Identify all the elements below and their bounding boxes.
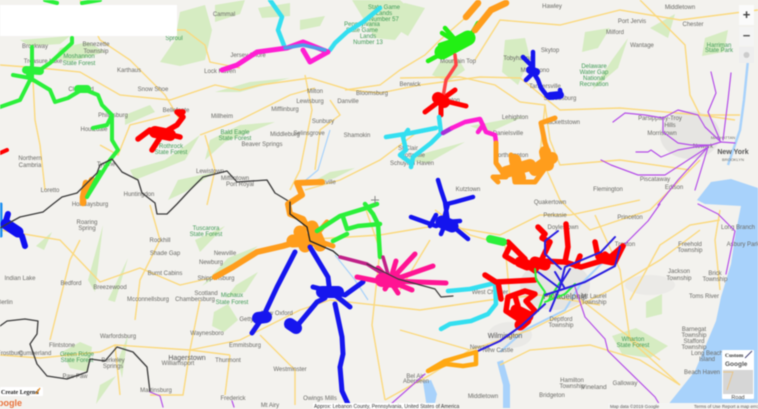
place labels: Hamilton <box>560 378 584 384</box>
park labels: State Forest <box>61 358 94 364</box>
title box <box>0 5 177 36</box>
place labels: Beach Haven <box>684 370 720 376</box>
park labels: Number 57 <box>369 17 400 23</box>
place labels: Shippensburg <box>197 276 235 282</box>
place labels: Morristown <box>647 131 677 137</box>
place labels: Mt Laurel <box>581 294 607 300</box>
place labels: Hollidaysburg <box>72 202 108 208</box>
place labels: Long Beach <box>691 351 723 357</box>
place labels: Snow Shoe <box>138 87 169 93</box>
park labels <box>60 5 734 364</box>
place labels: Doylestown <box>547 225 579 231</box>
place labels: Hackettstown <box>544 120 580 126</box>
place labels: Indian Lake <box>4 276 36 282</box>
place labels: Millersville <box>308 180 336 186</box>
park labels: Rothrock <box>159 144 184 150</box>
place labels: Chester <box>682 22 704 28</box>
place labels: Danville <box>337 99 359 105</box>
park labels: Lands <box>360 34 376 40</box>
large city labels <box>162 135 749 391</box>
place labels: Township <box>548 323 574 329</box>
large city labels: New York <box>717 149 749 156</box>
attribution bar <box>608 403 758 409</box>
place labels: Millheim <box>211 114 233 120</box>
place labels: Berkeley <box>101 358 125 364</box>
route network: blue Philadelphia <box>478 231 620 351</box>
place labels: Shamokin <box>344 133 370 139</box>
place labels: Lewistown <box>196 169 224 175</box>
park labels: National <box>583 76 605 82</box>
large city labels: Vineland <box>581 384 607 391</box>
zoom controls <box>739 5 754 63</box>
place labels: Shade Gap <box>150 251 181 257</box>
create legend button <box>0 387 43 396</box>
place labels: Township <box>581 300 607 306</box>
place labels: Toms River <box>689 294 719 300</box>
place labels: Flintstone <box>49 343 76 349</box>
park labels: State Forest <box>216 300 249 306</box>
place labels: Mountain Top <box>440 59 477 65</box>
park labels: State Forest <box>617 343 650 349</box>
place labels: Treasure Lake <box>24 59 63 65</box>
place labels: Brockway <box>22 44 48 50</box>
place labels: Rockhill <box>149 238 171 244</box>
place labels: Waynesboro <box>190 331 224 337</box>
place labels: Township <box>702 277 728 283</box>
park labels: State Game <box>368 5 401 11</box>
place labels: Mcconnellsburg <box>127 297 169 303</box>
place labels: Houtzdale <box>80 127 108 133</box>
park labels: Lands <box>376 11 392 17</box>
route network: cyan north <box>270 0 380 50</box>
route network: cyan middle <box>386 117 441 167</box>
place labels: Burnt Cabins <box>148 271 182 277</box>
route network: blue Kutztown <box>411 180 473 239</box>
route network: blue left <box>1 204 25 246</box>
place labels: Karthaus <box>117 68 141 74</box>
large city labels: Hagerstown <box>168 355 206 362</box>
place labels: Township <box>83 49 109 55</box>
place labels: Benezette <box>82 42 110 48</box>
route network: orange central <box>215 182 333 277</box>
park labels: Green Ridge <box>60 352 95 358</box>
place labels: Spring <box>78 226 96 232</box>
water <box>300 60 758 409</box>
park labels: Michaux <box>221 293 243 299</box>
place labels: Newville <box>214 251 237 257</box>
place labels: Wantage <box>630 43 655 49</box>
place labels: Milford <box>606 30 624 36</box>
park labels: Delaware <box>581 64 607 70</box>
place labels: Breezewood <box>93 285 127 291</box>
place labels: Jersey Shore <box>230 53 266 59</box>
place labels: Mt Pocono <box>521 68 550 74</box>
park labels: Bald Eagle <box>220 130 250 136</box>
map type control: Custom <box>725 353 744 359</box>
large city labels: Wilmington <box>488 333 522 340</box>
place labels: Port Jervis <box>618 19 646 25</box>
place labels: Lock Haven <box>204 69 236 75</box>
place labels: Piscataway <box>640 177 670 183</box>
place labels: Sunbury <box>312 119 334 125</box>
large city labels: West Chester <box>472 290 508 296</box>
park labels: Number 13 <box>353 40 384 46</box>
route network: central red <box>0 112 183 153</box>
place labels: Selinsgrove <box>293 131 325 137</box>
route network: blue Poconos <box>523 52 561 97</box>
place labels: Newburg <box>199 260 223 266</box>
black line through star <box>367 264 453 297</box>
place labels: Stroudsburg <box>544 96 576 102</box>
park labels: Pennsylvania <box>344 22 381 28</box>
place labels: Beaver Springs <box>241 142 283 148</box>
place labels: Township <box>681 345 707 351</box>
place labels: Jackson <box>668 269 690 275</box>
place labels: Roaring <box>76 220 98 226</box>
attribution bar: Terms of Use <box>694 404 721 409</box>
place labels: Trenton <box>615 242 635 248</box>
park labels: Recreation <box>579 82 609 88</box>
zoom controls: − <box>743 28 751 43</box>
route network: orange Altoona <box>83 180 92 203</box>
place labels: Mifflinburg <box>271 107 299 113</box>
place labels: Quakertown <box>534 200 566 206</box>
place labels: Tobyhanna <box>503 56 533 62</box>
park labels: State Forest <box>63 61 96 67</box>
route network: black line <box>0 159 290 392</box>
place labels: Middleburg <box>270 132 300 138</box>
route network: orange Allentown <box>493 118 555 182</box>
place labels: Mifflintown <box>221 176 249 182</box>
place labels: Galloway <box>613 381 637 387</box>
route network: red north <box>425 55 466 115</box>
place labels: Cumberland <box>19 351 51 357</box>
zoom controls: + <box>743 7 751 22</box>
place labels: Lehighton <box>502 115 528 121</box>
large city labels: MANHATTAN <box>711 135 735 140</box>
place labels: Barnegat <box>682 327 707 333</box>
place labels: Mt Airy <box>261 403 279 409</box>
purple transit lines <box>150 72 735 407</box>
place labels: Frederick <box>220 396 246 402</box>
place labels: Township <box>677 248 703 254</box>
crosshair <box>371 196 379 204</box>
route network: magenta <box>222 42 328 70</box>
place labels: Kutztown <box>456 187 480 193</box>
place labels: Princeton <box>617 215 643 221</box>
park labels: Water Gap <box>580 70 609 76</box>
place labels: Parsippany-Troy <box>638 116 682 122</box>
place labels: Emmitsburg <box>229 343 261 349</box>
park labels: State Forest <box>155 150 188 156</box>
place labels: Hills <box>664 123 676 129</box>
place labels: Flemington <box>593 187 623 193</box>
route network: red Philadelphia <box>485 224 623 325</box>
map type control: Road <box>731 395 745 401</box>
route network: magenta middle <box>443 119 496 142</box>
route network: green over Altoona <box>87 172 100 197</box>
large city labels: Williamsport <box>162 361 195 367</box>
attribution bar: Map data ©2019 Google <box>610 403 660 409</box>
place labels: Warfordsburg <box>100 334 136 340</box>
place labels: Freehold <box>678 242 702 248</box>
route network: green north <box>428 23 478 61</box>
route network: green central <box>317 204 380 257</box>
place labels: Island <box>699 357 715 363</box>
place labels: Middletown <box>665 5 695 11</box>
park labels: Sproul <box>165 36 183 42</box>
park labels: State Forest <box>219 136 252 142</box>
place labels: Bel Air <box>406 374 424 380</box>
urban areas <box>488 111 720 348</box>
place labels: Milton <box>307 89 323 95</box>
place labels: Westminster <box>273 367 307 373</box>
place labels: Port Royal <box>226 182 254 188</box>
place labels: Deptford <box>549 317 573 323</box>
place labels: Martinsburg <box>140 388 172 394</box>
place labels: Thurmont <box>215 358 241 364</box>
place labels: Bridgeton <box>539 393 565 399</box>
place labels: Tannersville <box>529 84 562 90</box>
black line through central routes <box>290 202 340 257</box>
park labels: Wharton <box>622 337 644 343</box>
place labels: Chambersburg <box>175 297 215 303</box>
large city labels: BROOKLYN <box>722 157 744 162</box>
park labels: State Park <box>705 48 734 54</box>
route network: cyan Philadelphia <box>441 283 496 329</box>
place labels: Owings Mills <box>303 396 337 402</box>
place labels: Philipsburg <box>98 113 128 119</box>
place labels: Danielsville <box>493 131 524 137</box>
place labels: St Clair <box>398 146 418 152</box>
place labels: Perkasie <box>543 213 567 219</box>
park labels: State Game <box>346 28 379 34</box>
place labels: Bloomsburg <box>356 91 388 97</box>
place labels: Schuylkill Haven <box>390 161 434 167</box>
large city labels: Philadelphia <box>543 292 587 301</box>
route network: orange north <box>466 3 506 30</box>
route network: blue central <box>252 247 363 404</box>
place labels: Northern <box>18 156 42 162</box>
place labels: Berwick <box>399 82 421 88</box>
route network: magenta star <box>340 254 446 293</box>
place labels: Paw Paw <box>62 374 88 380</box>
place labels: Hazleton <box>436 98 460 104</box>
route network: orange Delaware <box>428 352 476 371</box>
park labels: Tuscarora <box>193 226 220 232</box>
place labels: Edison <box>665 185 683 191</box>
place labels: Township <box>559 384 585 390</box>
create legend button: Create Legend <box>1 390 39 396</box>
map type control: Google <box>725 361 748 368</box>
route network: left green <box>0 0 118 197</box>
map type control <box>722 350 754 401</box>
place labels: Aberdeen <box>403 379 429 385</box>
place labels: Long Branch <box>721 225 755 231</box>
park labels: Moshannon <box>63 54 95 60</box>
place labels: Lewisburg <box>296 99 324 105</box>
place labels: Cambria <box>19 163 42 169</box>
place labels: Middletown <box>468 394 498 400</box>
park labels: State Forest <box>190 232 223 238</box>
place labels: Huntingdon <box>124 192 154 198</box>
place labels: Newark <box>693 144 714 150</box>
place labels: Hawley <box>542 4 562 10</box>
place labels: Township <box>681 333 707 339</box>
place labels: Skytop <box>541 48 560 54</box>
place labels: New Castle <box>483 348 514 354</box>
place labels: Cammal <box>213 12 235 18</box>
place labels: Loretto <box>41 188 60 194</box>
place labels: Springs <box>103 364 123 370</box>
place labels: New Oxford <box>261 311 293 317</box>
place labels: Northampton <box>494 153 528 159</box>
place labels: Scotland <box>194 291 218 297</box>
place labels: Bedford <box>60 281 82 287</box>
place labels: Bellefonte <box>163 108 190 114</box>
place labels: Stafford <box>684 339 704 345</box>
route network: green Philadelphia <box>490 239 575 311</box>
park labels: Harriman <box>707 43 731 49</box>
place labels: Gettysburg <box>239 317 269 323</box>
place labels: Township <box>666 276 692 282</box>
place labels: Pottsville <box>401 153 426 159</box>
place labels: Tyrone <box>97 162 116 168</box>
place labels: Clearfield <box>68 87 94 93</box>
place labels: Brick <box>708 271 723 277</box>
place labels: Newark <box>470 345 491 351</box>
